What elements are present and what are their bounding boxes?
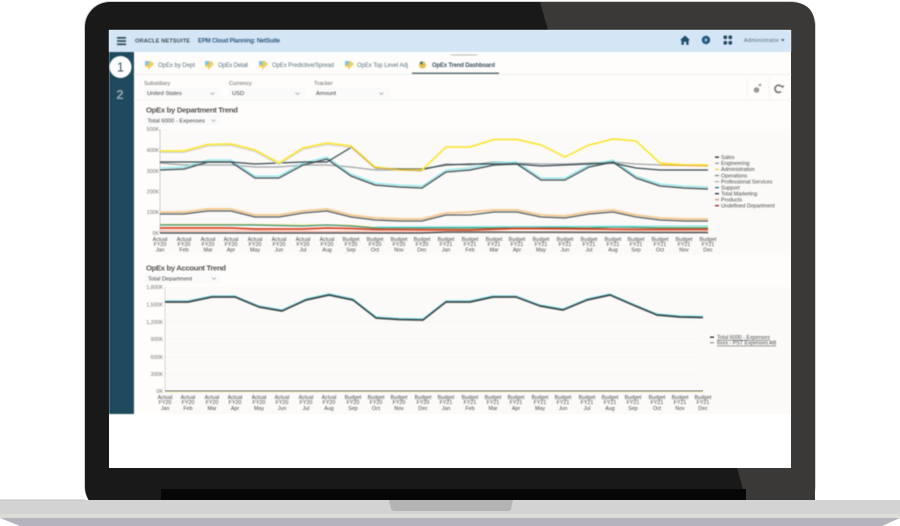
x axis labels: Jan xyxy=(442,406,450,412)
x axis labels: FY21 xyxy=(674,400,686,406)
legend: accounts xyxy=(710,335,777,347)
x axis labels: Budget xyxy=(625,395,642,401)
filters: USD xyxy=(232,91,244,97)
x axis labels: FY21 xyxy=(630,242,642,248)
header bar xyxy=(109,30,791,52)
x axis labels: Feb xyxy=(465,248,475,254)
line chart: account trend xyxy=(146,285,790,414)
x axis labels: FY21 xyxy=(583,242,595,248)
x axis labels xyxy=(158,395,712,412)
x axis labels: Mar xyxy=(207,406,217,412)
y axis: 300K xyxy=(147,169,159,175)
x axis labels: FY21 xyxy=(604,400,616,406)
legend: departments: Administration xyxy=(721,167,755,173)
x axis labels: Budget xyxy=(652,237,669,243)
x axis labels: Jul xyxy=(586,248,592,254)
logo: ORACLE NETSUITE xyxy=(135,39,190,45)
x axis labels: Actual xyxy=(158,395,172,401)
x axis labels: Budget xyxy=(509,237,526,243)
x axis labels: Budget xyxy=(508,395,525,401)
app title: EPM Cloud Planning: NetSuite xyxy=(198,39,281,45)
y axis xyxy=(147,127,159,237)
x axis labels: Jan xyxy=(442,248,450,254)
trackpad notch xyxy=(389,500,513,511)
x axis labels: Apr xyxy=(512,406,520,412)
x axis labels: Actual xyxy=(181,395,195,401)
sidebar xyxy=(109,52,134,414)
x axis labels: FY20 xyxy=(273,242,285,248)
filters xyxy=(134,78,791,100)
x axis labels: Sep xyxy=(348,406,358,412)
x axis labels: Aug xyxy=(605,406,615,412)
filters: United States xyxy=(147,91,182,97)
icon: settings xyxy=(754,84,761,93)
tabs: OpEx Top Level Adj xyxy=(357,63,408,69)
x axis labels: FY21 xyxy=(510,400,522,406)
x axis labels: Sep xyxy=(628,406,638,412)
x axis labels: Dec xyxy=(703,248,713,254)
x axis labels: Actual xyxy=(205,395,219,401)
x axis labels: Nov xyxy=(394,248,404,254)
x axis labels: FY20 xyxy=(159,400,171,406)
x axis labels: FY20 xyxy=(321,242,333,248)
legend: departments: Undefined Department xyxy=(721,204,775,210)
x axis labels: Jul xyxy=(584,406,590,412)
x axis labels xyxy=(153,237,717,254)
tabs: OpEx Trend Dashboard xyxy=(432,63,495,69)
x axis labels: Budget xyxy=(581,237,598,243)
x axis labels: Budget xyxy=(649,395,666,401)
x axis labels: Oct xyxy=(653,406,662,412)
x axis labels: Actual xyxy=(296,237,310,243)
x axis labels: Jul xyxy=(300,248,306,254)
legend: departments: Professional Services xyxy=(721,179,773,185)
x axis labels: Budget xyxy=(700,237,717,243)
dropdown: expenses xyxy=(144,115,220,125)
x axis labels: Jun xyxy=(275,248,283,254)
x axis labels: Oct xyxy=(372,406,381,412)
x axis labels: Jul xyxy=(303,406,309,412)
x axis labels: Actual xyxy=(252,395,266,401)
heading: account trend: OpEx by Account Trend xyxy=(146,264,226,272)
legend: departments xyxy=(715,155,775,210)
x axis labels: Budget xyxy=(555,395,572,401)
x axis labels: Budget xyxy=(579,395,596,401)
x axis labels: Actual xyxy=(322,395,336,401)
x axis labels: FY20 xyxy=(202,242,214,248)
x axis labels: Budget xyxy=(628,237,645,243)
x axis labels: FY20 xyxy=(393,400,405,406)
x axis labels: Budget xyxy=(672,395,689,401)
x axis labels: Apr xyxy=(227,248,235,254)
x axis labels: Actual xyxy=(201,237,215,243)
tabs xyxy=(134,54,791,75)
user menu: Administrator xyxy=(744,38,779,44)
x axis labels: Oct xyxy=(371,248,380,254)
x axis labels: FY20 xyxy=(345,242,357,248)
x axis labels: FY20 xyxy=(249,242,261,248)
dropdown: expenses: Total 6000 - Expenses xyxy=(148,118,205,124)
x axis labels: Budget xyxy=(391,237,408,243)
x axis labels: Budget xyxy=(605,237,622,243)
icon: menu xyxy=(117,37,126,45)
sidebar: 2 xyxy=(116,87,124,102)
x axis labels: Apr xyxy=(513,248,521,254)
laptop lid xyxy=(84,1,816,512)
x axis labels: FY20 xyxy=(225,242,237,248)
x axis labels: Budget xyxy=(485,395,502,401)
x axis labels: FY21 xyxy=(627,400,639,406)
x axis labels: FY21 xyxy=(511,242,523,248)
x axis labels: Budget xyxy=(345,395,362,401)
x axis labels: FY21 xyxy=(559,242,571,248)
y axis: 100K xyxy=(147,210,159,216)
x axis labels: FY21 xyxy=(557,400,569,406)
x axis labels: Aug xyxy=(322,248,332,254)
x axis labels: FY21 xyxy=(697,400,709,406)
x axis labels: FY21 xyxy=(607,242,619,248)
x axis labels: FY20 xyxy=(347,400,359,406)
x axis labels: FY20 xyxy=(276,400,288,406)
filters: Tracker xyxy=(314,81,333,87)
legend: departments: Products xyxy=(721,198,742,204)
x axis labels: Apr xyxy=(231,406,239,412)
x axis labels: Feb xyxy=(179,248,189,254)
x axis labels: Budget xyxy=(438,237,455,243)
x axis labels: FY21 xyxy=(534,400,546,406)
y axis: 1,500K xyxy=(146,302,163,308)
x axis labels: Mar xyxy=(488,406,498,412)
x axis labels: May xyxy=(250,248,260,254)
icon: home xyxy=(680,36,690,45)
x axis labels: Nov xyxy=(394,406,404,412)
x axis labels: Budget xyxy=(391,395,408,401)
legend: departments: Engineering xyxy=(721,161,750,167)
x axis labels: Budget xyxy=(414,237,431,243)
x axis labels: FY20 xyxy=(206,400,218,406)
legend: departments: Sales xyxy=(721,155,735,161)
x axis labels: Dec xyxy=(698,406,708,412)
icon: refresh xyxy=(775,85,781,92)
x axis labels: Budget xyxy=(602,395,619,401)
x axis labels: Jun xyxy=(278,406,286,412)
x axis labels: FY20 xyxy=(253,400,265,406)
x axis labels: Actual xyxy=(248,237,262,243)
x axis labels: FY20 xyxy=(182,400,194,406)
x axis labels: Budget xyxy=(695,395,712,401)
x axis labels: Actual xyxy=(299,395,313,401)
x axis labels: Budget xyxy=(533,237,550,243)
y axis: 1,200K xyxy=(146,320,163,326)
y axis: 500K xyxy=(147,127,159,133)
x axis labels: FY21 xyxy=(702,242,714,248)
x axis labels: Budget xyxy=(368,395,385,401)
y axis: 0K xyxy=(157,389,163,395)
filters: Amount xyxy=(316,91,336,97)
x axis labels: FY20 xyxy=(369,242,381,248)
y axis xyxy=(146,285,163,395)
y axis: 400K xyxy=(147,148,159,154)
x axis labels: FY21 xyxy=(678,242,690,248)
x axis labels: Actual xyxy=(177,237,191,243)
icon: grid xyxy=(724,36,732,45)
filters: Currency xyxy=(229,81,252,87)
x axis labels: FY20 xyxy=(178,242,190,248)
x axis labels: Budget xyxy=(343,237,360,243)
x axis labels: Feb xyxy=(183,406,193,412)
x axis labels: FY20 xyxy=(154,242,166,248)
filters: Subsidiary xyxy=(144,81,170,87)
x axis labels: Jan xyxy=(161,406,169,412)
x axis labels: Actual xyxy=(275,395,289,401)
legend: departments: Total Marketing xyxy=(721,192,757,198)
x axis labels: Mar xyxy=(489,248,499,254)
x axis labels: Aug xyxy=(608,248,618,254)
x axis labels: FY21 xyxy=(535,242,547,248)
x axis labels: Oct xyxy=(656,248,665,254)
x axis labels: Aug xyxy=(324,406,334,412)
legend: accounts: Total 6000 - Expenses xyxy=(717,335,770,341)
x axis labels: FY21 xyxy=(440,400,452,406)
tabs: OpEx Predictive/Spread xyxy=(272,63,334,69)
x axis labels: Actual xyxy=(320,237,334,243)
heading: department trend: OpEx by Department Trend xyxy=(146,106,238,114)
icon: navigator xyxy=(702,36,710,44)
x axis labels: FY21 xyxy=(651,400,663,406)
x axis labels: Actual xyxy=(228,395,242,401)
y axis: 0K xyxy=(153,231,159,237)
x axis labels: FY20 xyxy=(297,242,309,248)
x axis labels: Budget xyxy=(462,395,479,401)
legend: departments: Operations xyxy=(721,173,747,179)
sidebar: 1 xyxy=(117,60,124,74)
x axis labels: Budget xyxy=(367,237,384,243)
dropdown: department xyxy=(144,273,220,283)
x axis labels: Actual xyxy=(153,237,167,243)
laptop base xyxy=(0,500,900,526)
x axis labels: Mar xyxy=(203,248,213,254)
x axis labels: FY21 xyxy=(654,242,666,248)
x axis labels: Jan xyxy=(156,248,164,254)
x axis labels: Budget xyxy=(438,395,455,401)
x axis labels: Dec xyxy=(418,406,428,412)
x axis labels: FY21 xyxy=(464,242,476,248)
dropdown: department: Total Department xyxy=(148,276,193,282)
x axis labels: FY20 xyxy=(370,400,382,406)
x axis labels: Jun xyxy=(561,248,569,254)
x axis labels: Jun xyxy=(559,406,567,412)
screen xyxy=(109,30,791,468)
x axis labels: FY20 xyxy=(417,400,429,406)
x axis labels: Budget xyxy=(486,237,503,243)
y axis: 200K xyxy=(147,190,159,196)
x axis labels: May xyxy=(535,406,545,412)
x axis labels: FY21 xyxy=(581,400,593,406)
x axis labels: Budget xyxy=(462,237,479,243)
x axis labels: FY20 xyxy=(300,400,312,406)
x axis labels: FY20 xyxy=(323,400,335,406)
legend: departments: Support xyxy=(721,185,740,191)
x axis labels: FY21 xyxy=(464,400,476,406)
x axis labels: Nov xyxy=(679,248,689,254)
x axis labels: May xyxy=(536,248,546,254)
x axis labels: FY20 xyxy=(393,242,405,248)
tabs: OpEx Detail xyxy=(218,63,248,69)
y axis: 1,800K xyxy=(146,285,163,291)
line chart: department trend xyxy=(147,127,790,255)
x axis labels: Actual xyxy=(272,237,286,243)
legend: accounts: 6xxx - PST Expenses AB xyxy=(717,341,777,347)
x axis labels: FY20 xyxy=(416,242,428,248)
x axis labels: FY20 xyxy=(229,400,241,406)
x axis labels: FY21 xyxy=(488,242,500,248)
x axis labels: Nov xyxy=(675,406,685,412)
y axis: 900K xyxy=(151,337,163,343)
x axis labels: Sep xyxy=(346,248,356,254)
x axis labels: Budget xyxy=(532,395,549,401)
y axis: 300K xyxy=(151,372,163,378)
x axis labels: Budget xyxy=(415,395,432,401)
y axis: 600K xyxy=(151,355,163,361)
x axis labels: Dec xyxy=(417,248,427,254)
x axis labels: Sep xyxy=(631,248,641,254)
x axis labels: FY21 xyxy=(440,242,452,248)
x axis labels: FY21 xyxy=(487,400,499,406)
x axis labels: Budget xyxy=(557,237,574,243)
x axis labels: Budget xyxy=(676,237,693,243)
x axis labels: Feb xyxy=(465,406,475,412)
x axis labels: May xyxy=(254,406,264,412)
tabs: OpEx by Dept xyxy=(158,63,195,69)
x axis labels: Actual xyxy=(224,237,238,243)
